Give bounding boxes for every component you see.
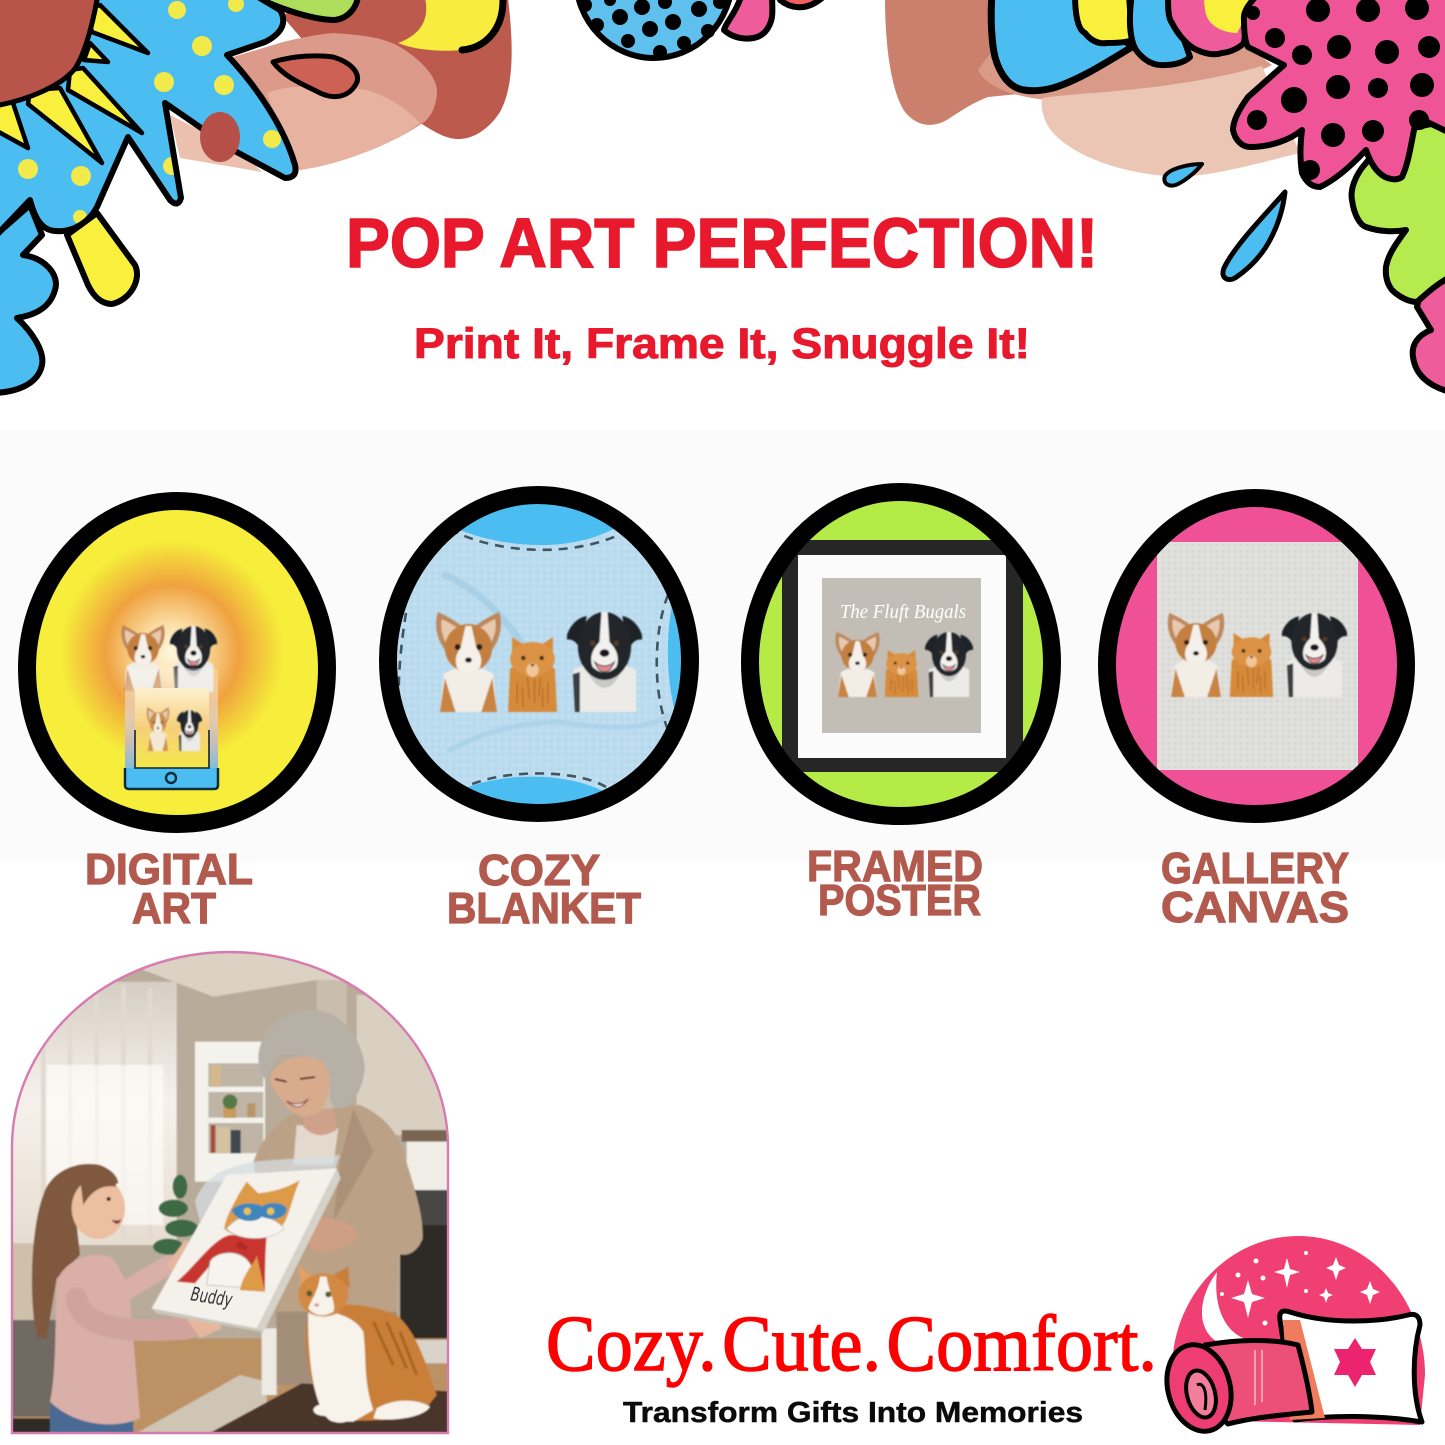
panel: cozy blanket bbox=[378, 486, 700, 823]
night sky bbox=[1172, 1236, 1425, 1425]
pets bbox=[436, 612, 643, 712]
pillow bbox=[1280, 1311, 1422, 1422]
ginger cat bbox=[298, 1265, 437, 1423]
blue splat outline bbox=[0, 0, 296, 242]
mat bbox=[798, 555, 1006, 758]
label: gallery canvas: GALLERY bbox=[1161, 844, 1349, 893]
sub tagline: Transform Gifts Into Memories bbox=[623, 1397, 1083, 1429]
plant bbox=[153, 1175, 198, 1255]
icon: tablet bbox=[125, 668, 218, 789]
table leg bbox=[262, 1328, 277, 1395]
frame bbox=[782, 540, 1023, 772]
rug bbox=[138, 1374, 268, 1432]
label: framed poster bbox=[807, 842, 983, 925]
stitching bbox=[399, 529, 668, 793]
yellow drip bbox=[67, 213, 137, 304]
pink polka splat bbox=[1233, 0, 1445, 187]
upper blue splat bbox=[0, 0, 296, 242]
floor bbox=[7, 1338, 457, 1438]
brick blob bbox=[0, 0, 98, 106]
paint splash: top left bbox=[0, 0, 512, 393]
girl bbox=[32, 1164, 222, 1435]
canvas bbox=[1157, 542, 1358, 770]
large blue drop bbox=[1223, 192, 1285, 280]
lower pink splat bbox=[1413, 277, 1445, 392]
product band background bbox=[0, 430, 1445, 862]
cat name: Buddy bbox=[189, 1282, 234, 1312]
photo: grandmother and girl with cat portrait bbox=[7, 945, 457, 1438]
panel: digital art bbox=[18, 490, 338, 835]
brand tagline: Cozy. Cute. Comfort. bbox=[546, 1301, 1157, 1388]
label: digital art: ART bbox=[132, 884, 216, 933]
curtain window bbox=[10, 982, 177, 1245]
label: cozy blanket: COZY bbox=[478, 846, 600, 895]
cat drawing bbox=[177, 1180, 300, 1292]
ceiling bbox=[143, 953, 340, 997]
sofa bbox=[13, 1243, 56, 1432]
print bbox=[822, 578, 981, 733]
panel: framed poster bbox=[741, 483, 1063, 825]
subtitle: Print It, Frame It, Snuggle It! bbox=[414, 320, 1030, 368]
small blue drop bbox=[1164, 164, 1202, 186]
black polka dots bbox=[1246, 0, 1440, 180]
blanket bbox=[397, 529, 674, 791]
paint splash: top center bbox=[576, 0, 822, 59]
label: framed poster: POSTER bbox=[818, 876, 981, 925]
pets bbox=[1168, 613, 1348, 697]
label: cozy blanket: BLANKET bbox=[447, 884, 641, 933]
lime splat bbox=[1352, 120, 1445, 302]
brick dot bbox=[200, 112, 240, 162]
stars bbox=[1220, 1251, 1380, 1326]
far room bbox=[316, 980, 347, 1109]
lower blue splat bbox=[0, 205, 56, 393]
grandmother bbox=[253, 1010, 423, 1392]
moon bbox=[1202, 1272, 1254, 1346]
drop outline bbox=[273, 56, 358, 97]
paint splash: top right bbox=[885, 0, 1445, 392]
label: digital art: DIGITAL bbox=[85, 845, 253, 894]
icon: blanket and pillow night logo bbox=[1158, 1236, 1425, 1439]
plastic wrap bbox=[195, 1155, 340, 1222]
polka dot ball bbox=[576, 0, 732, 58]
pets bbox=[835, 632, 974, 697]
orange glow bbox=[65, 545, 279, 748]
label: digital art bbox=[85, 845, 253, 933]
label: gallery canvas bbox=[1161, 844, 1349, 932]
script caption: The Fluft Bugals bbox=[840, 601, 966, 623]
table bbox=[210, 1382, 447, 1432]
panel: gallery canvas bbox=[1098, 489, 1416, 824]
label: gallery canvas: CANVAS bbox=[1161, 883, 1349, 932]
bookshelf bbox=[195, 1042, 265, 1182]
fireplace bbox=[400, 1130, 453, 1340]
pets: corgi and collie bbox=[121, 625, 218, 692]
rolled blanket bbox=[1198, 1340, 1312, 1424]
portrait canvas bbox=[152, 1168, 341, 1332]
title: POP ART PERFECTION! bbox=[346, 204, 1098, 282]
yellow spikes bbox=[0, 5, 148, 163]
yellow dots bbox=[18, 0, 281, 224]
label: framed poster: FRAMED bbox=[807, 842, 983, 891]
label: cozy blanket bbox=[447, 846, 641, 933]
